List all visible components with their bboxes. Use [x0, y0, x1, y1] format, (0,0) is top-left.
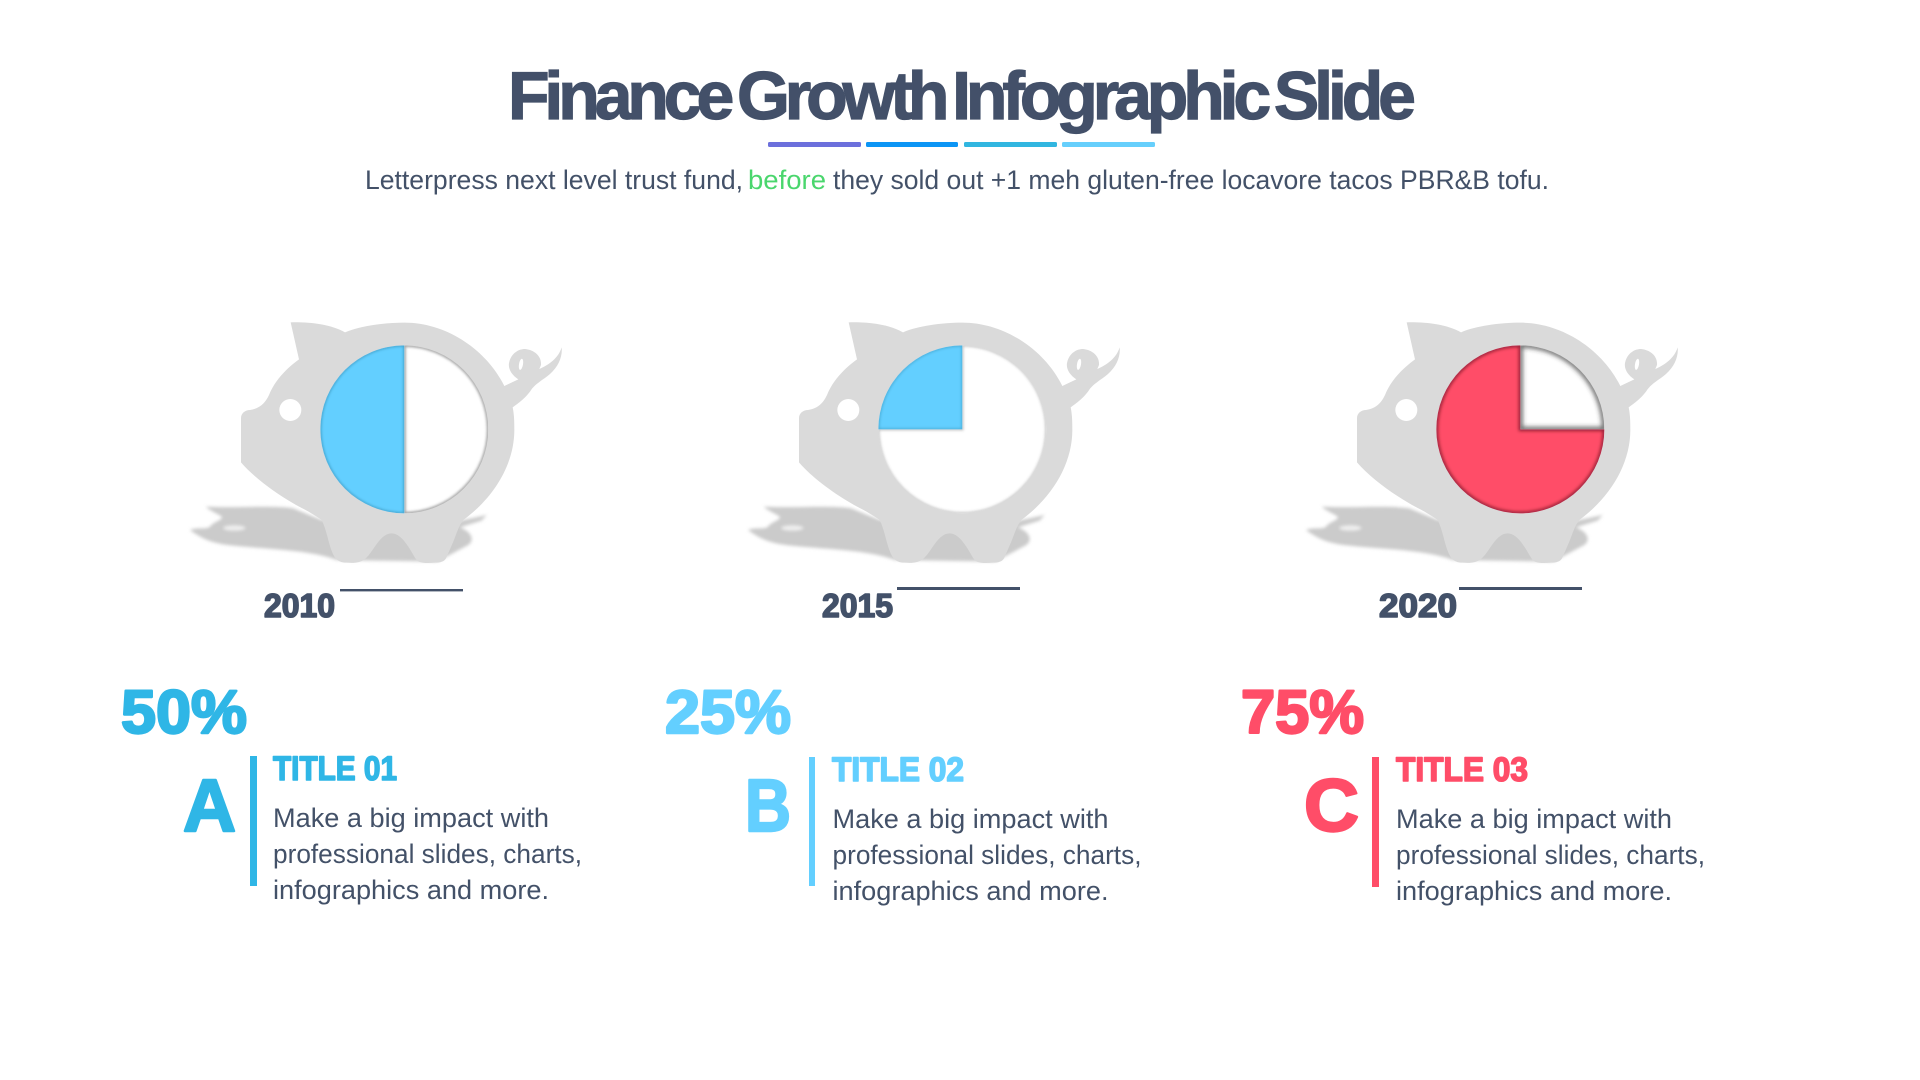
panel: 2015 piggy chart	[748, 322, 1120, 563]
heading: TITLE 03: TITLE 03	[1396, 751, 1528, 789]
panel: item C	[1241, 678, 1705, 906]
year: 2015: 2015	[822, 587, 893, 624]
year rule 2020	[1459, 587, 1582, 590]
pie: 25%	[878, 345, 1046, 513]
heading: TITLE 01: TITLE 01	[273, 750, 397, 788]
body text C: infographics and more.	[1396, 876, 1672, 906]
body text A: Make a big impact with	[273, 803, 549, 833]
body text C	[1396, 804, 1705, 906]
body text B: Make a big impact with	[832, 804, 1108, 834]
vertical bar A	[250, 756, 257, 886]
percent 50%: 50%	[121, 678, 247, 746]
vertical bar C	[1372, 757, 1379, 887]
body text B: infographics and more.	[832, 876, 1108, 906]
body text A: infographics and more.	[273, 875, 549, 905]
letter B: B	[745, 764, 791, 847]
subtitle: they sold out +1 meh gluten-free locavore tacos PBR&B tofu.	[833, 165, 1549, 195]
subtitle: before	[748, 165, 826, 195]
year rule 2015	[897, 587, 1020, 590]
body text A: professional slides, charts,	[273, 839, 582, 869]
pie: 75%	[1436, 345, 1604, 513]
body text C: professional slides, charts,	[1396, 840, 1705, 870]
pie: 50%	[320, 345, 488, 513]
panel: item B	[665, 678, 1142, 906]
letter A: A	[183, 764, 236, 847]
letter C: C	[1304, 764, 1359, 847]
subtitle: Letterpress next level trust fund,	[365, 165, 743, 195]
year: 2020: 2020	[1379, 587, 1457, 624]
panel: 2010 piggy chart	[190, 322, 562, 563]
body text B: professional slides, charts,	[832, 840, 1142, 870]
body text B	[832, 804, 1142, 906]
percent 75%: 75%	[1241, 678, 1364, 746]
heading: TITLE 02: TITLE 02	[832, 751, 964, 789]
panel: 2020 piggy chart	[1306, 322, 1678, 563]
title underline bars	[768, 142, 1155, 147]
vertical bar B	[809, 757, 815, 886]
body text C: Make a big impact with	[1396, 804, 1672, 834]
body text A	[273, 803, 582, 905]
year rule 2010	[340, 589, 463, 591]
title: Finance Growth Infographic Slide	[508, 58, 1416, 134]
subtitle	[365, 165, 1549, 195]
percent 25%: 25%	[665, 678, 791, 746]
year: 2010: 2010	[264, 587, 335, 624]
panel: item A	[121, 678, 582, 905]
